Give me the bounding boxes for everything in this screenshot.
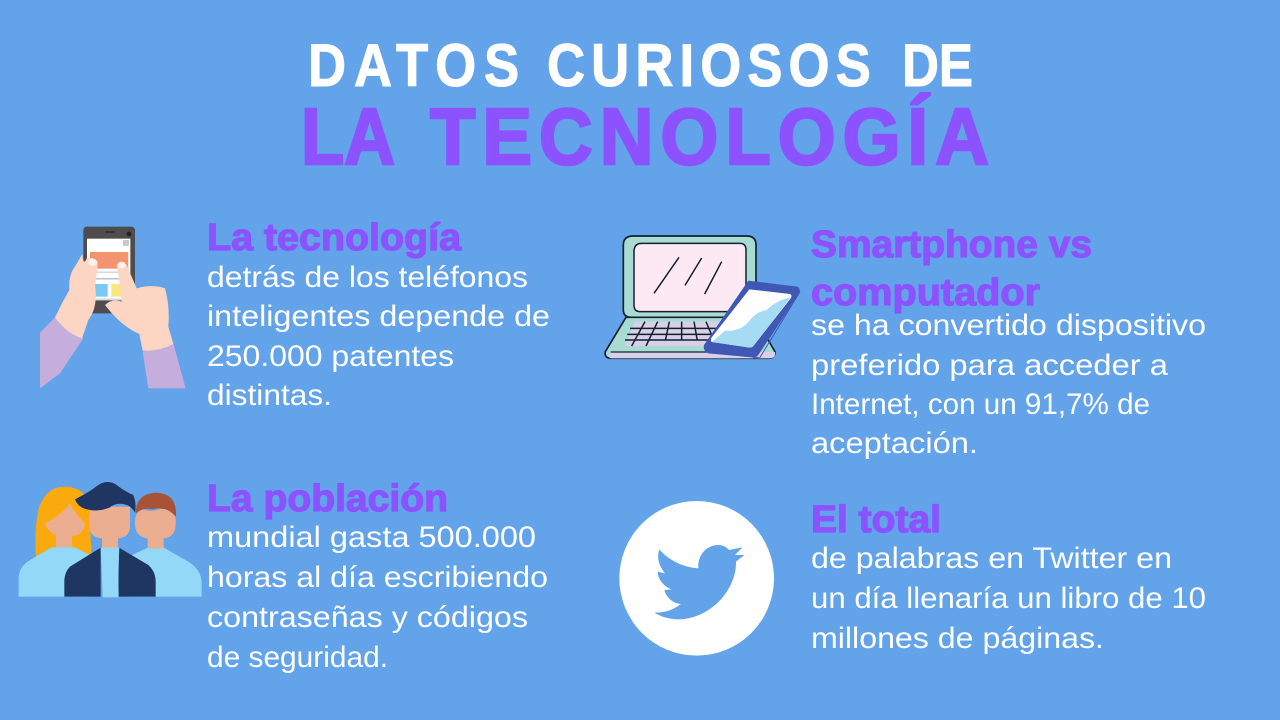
- heading: El total: [811, 499, 941, 541]
- icon: twitter logo: [619, 501, 774, 656]
- text block: contraseñas y códigos: [207, 601, 528, 634]
- panel: smartphone vs computador: [811, 224, 1206, 460]
- panel: la tecnología: [207, 217, 550, 412]
- heading: La tecnología: [207, 217, 462, 259]
- text block: Internet, con un 91,7% de: [811, 388, 1150, 421]
- title line 1: [308, 32, 973, 99]
- heading: [811, 224, 1092, 314]
- text block: 250.000 patentes: [207, 340, 454, 373]
- panel: la población: [207, 478, 548, 674]
- title line 1: DATOS: [308, 32, 519, 99]
- title line 1: DE: [902, 32, 973, 99]
- title line 2: TECNOLOGÍA: [430, 93, 989, 182]
- text block: [811, 542, 1206, 655]
- text block: de seguridad.: [207, 641, 388, 674]
- text block: millones de páginas.: [811, 622, 1104, 655]
- text block: mundial gasta 500.000: [207, 521, 536, 554]
- text block: un día llenaría un libro de 10: [811, 582, 1206, 615]
- heading: Smartphone vs: [811, 224, 1092, 266]
- text block: aceptación.: [811, 427, 978, 460]
- text block: horas al día escribiendo: [207, 561, 548, 594]
- text block: de palabras en Twitter en: [811, 542, 1172, 575]
- panel: el total: [811, 499, 1206, 655]
- title line 2: LA: [301, 92, 395, 181]
- heading: La población: [207, 478, 448, 520]
- title line 1: CURIOSOS: [547, 32, 871, 99]
- icon: group of people: [19, 482, 202, 597]
- icon: hands holding smartphone: [40, 227, 186, 388]
- text block: se ha convertido dispositivo: [811, 309, 1206, 342]
- text block: inteligentes depende de: [207, 300, 550, 333]
- text block: [207, 521, 548, 674]
- text block: [207, 261, 550, 412]
- title: [301, 32, 989, 182]
- text block: distintas.: [207, 379, 332, 412]
- text block: [811, 309, 1206, 460]
- icon: laptop and phone: [605, 236, 800, 358]
- text block: preferido para acceder a: [811, 349, 1168, 382]
- text block: detrás de los teléfonos: [207, 261, 528, 294]
- heading: computador: [811, 272, 1040, 314]
